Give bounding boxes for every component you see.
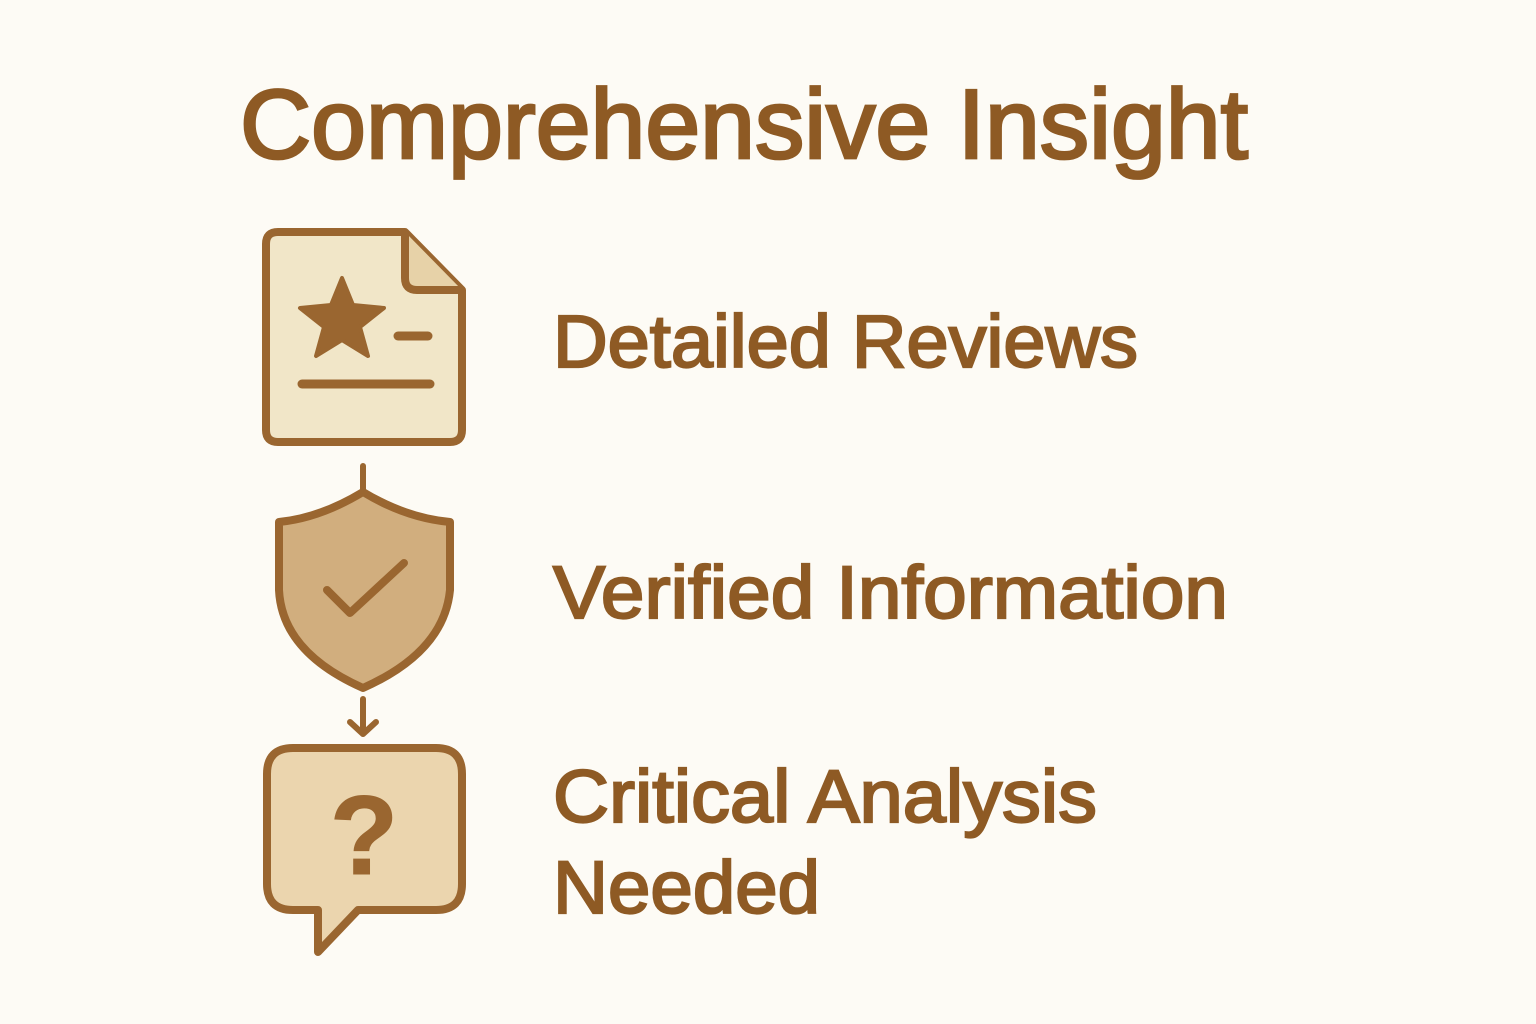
label: critical analysis needed: Critical Analysis bbox=[553, 755, 1097, 838]
label: critical analysis needed: Needed bbox=[553, 846, 820, 929]
label: critical analysis needed bbox=[553, 755, 1097, 929]
icon: document with star bbox=[266, 232, 462, 442]
icon: speech bubble question bbox=[267, 748, 462, 952]
icon: shield with check bbox=[279, 492, 450, 688]
connector line bbox=[360, 466, 366, 492]
label: detailed reviews: Detailed Reviews bbox=[553, 300, 1138, 383]
label: verified information: Verified Information bbox=[553, 551, 1228, 634]
icon: speech bubble question: ? bbox=[330, 773, 398, 898]
title: Comprehensive Insight bbox=[240, 69, 1248, 179]
arrow bbox=[350, 699, 376, 734]
